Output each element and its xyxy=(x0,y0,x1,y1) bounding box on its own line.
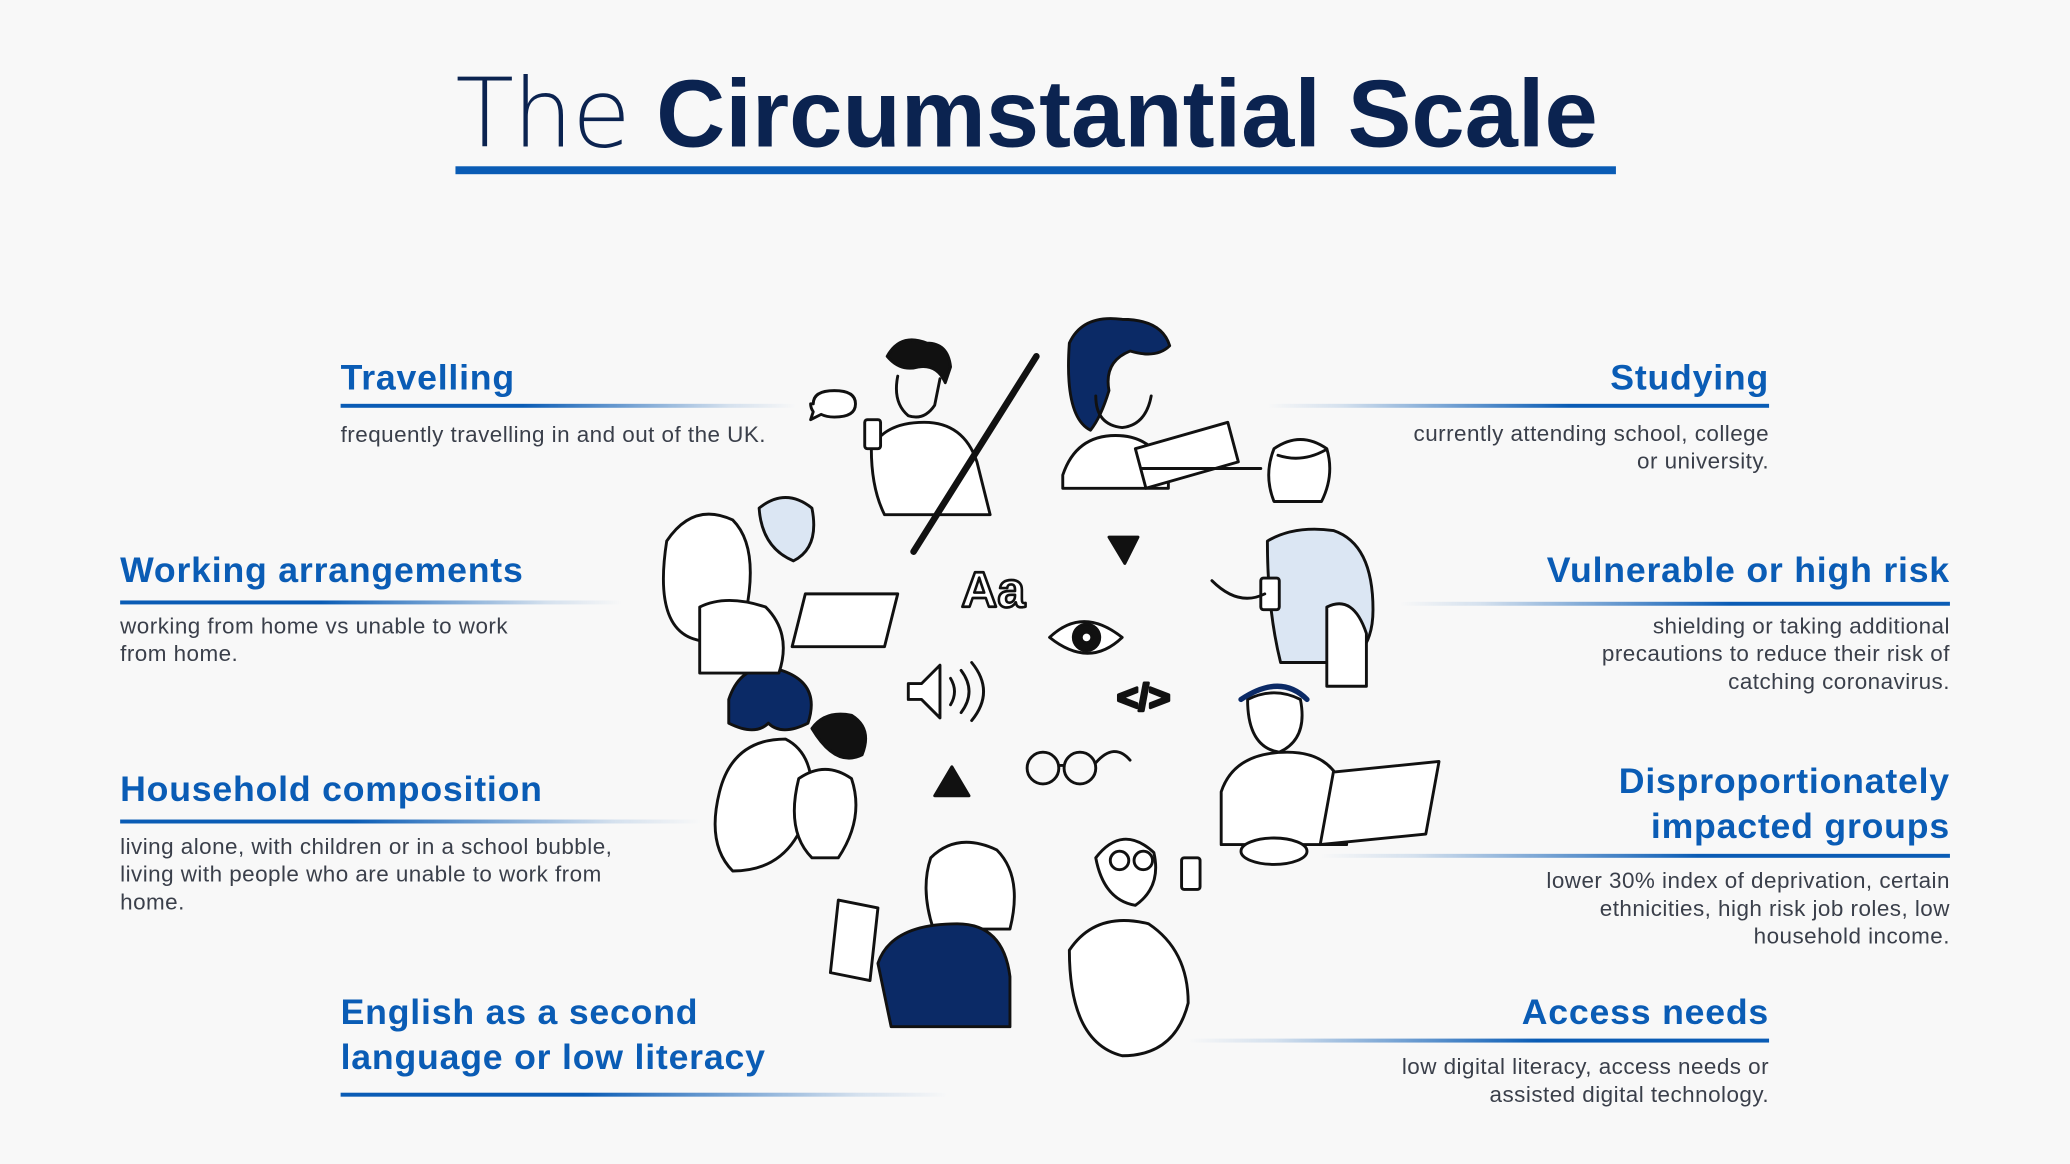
item: Vulnerable or high risk: Vulnerable or high risk xyxy=(1547,550,1950,590)
item: Studying xyxy=(1284,358,1770,474)
item: Working arrangements: from home. xyxy=(120,641,238,666)
person: traveller with cane xyxy=(811,340,1036,552)
item: English as a second language xyxy=(340,992,928,1097)
icon: speaker xyxy=(908,662,984,721)
item: Disproportionately impacted groups: impacted groups xyxy=(1651,806,1950,846)
title: The Circumstantial Scale xyxy=(455,59,1598,170)
icon: eye xyxy=(1050,622,1122,653)
item: Travelling: Travelling xyxy=(341,358,515,397)
icon: triangle bottom xyxy=(935,767,969,796)
person: older man with phone xyxy=(1069,839,1200,1056)
item: Vulnerable or high risk: catching coronavirus. xyxy=(1728,669,1950,694)
item: Vulnerable or high risk: shielding or taking additional xyxy=(1653,614,1950,639)
icon: triangle top xyxy=(1109,537,1138,564)
item: Working arrangements: Working arrangements xyxy=(120,550,524,590)
item: Vulnerable or high risk: precautions to reduce their risk of xyxy=(1602,641,1950,666)
item: Access needs xyxy=(1208,992,1770,1107)
item: Travelling xyxy=(340,358,781,447)
person: vulnerable with bag xyxy=(1212,439,1373,686)
item: Studying: currently attending school, college xyxy=(1414,421,1769,446)
icon: Aa: Aa xyxy=(961,562,1026,618)
item: Household composition: Household composition xyxy=(120,769,543,809)
icon: glasses xyxy=(1027,752,1130,784)
item: Working arrangements xyxy=(120,550,605,666)
item: Working arrangements: working from home vs unable to work xyxy=(120,614,508,639)
illustration: circle of people xyxy=(662,317,1440,1058)
item: Studying: or university. xyxy=(1637,449,1769,474)
item: Disproportionately impacted groups: Disproportionately xyxy=(1619,761,1950,801)
item: Travelling: frequently travelling in and out of the UK. xyxy=(341,422,766,447)
item: Disproportionately impacted groups: lower 30% index of deprivation, certain xyxy=(1546,868,1950,893)
person: headset with laptop xyxy=(1221,686,1439,864)
person: mother and child xyxy=(715,668,866,871)
person: student with laptop xyxy=(1063,319,1261,488)
person: couple with laptop xyxy=(663,498,898,673)
item: Household composition: living alone, with children or in a school bubble, xyxy=(120,834,612,859)
item: Disproportionately impacted groups xyxy=(1342,761,1950,949)
item: Disproportionately impacted groups: ethnicities, high risk job roles, low xyxy=(1600,896,1950,921)
item: Household composition xyxy=(120,769,682,915)
icon: code: </> xyxy=(1117,677,1170,718)
item: Access needs: Access needs xyxy=(1522,992,1769,1032)
item: English as a second language: language or low literacy xyxy=(341,1037,766,1077)
item: Disproportionately impacted groups: household income. xyxy=(1754,924,1950,949)
item: English as a second language: English as a second xyxy=(341,992,698,1032)
person: woman with tablet xyxy=(830,842,1014,1027)
item: Access needs: low digital literacy, access needs or xyxy=(1402,1054,1769,1080)
item: Vulnerable or high risk xyxy=(1418,550,1950,694)
item: Access needs: assisted digital technology. xyxy=(1490,1082,1769,1107)
item: Studying: Studying xyxy=(1610,358,1769,397)
item: Household composition: living with people who are unable to work from xyxy=(120,862,602,887)
item: Household composition: home. xyxy=(120,889,185,915)
